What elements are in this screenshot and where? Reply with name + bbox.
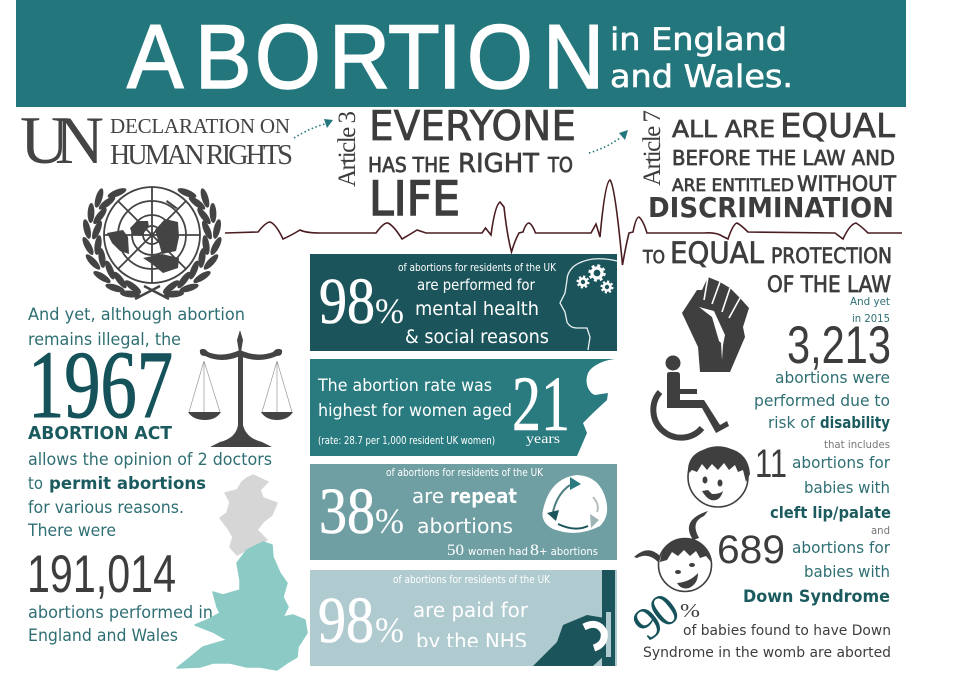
panel: repeat abortions: women had xyxy=(468,545,528,558)
continents xyxy=(107,200,179,273)
heartbeat line xyxy=(225,180,902,265)
article 7 text: WITHOUT xyxy=(797,172,896,196)
stat: 38%: 38 xyxy=(319,475,375,548)
panel: left column text: There were xyxy=(27,521,116,541)
subtitle: in England xyxy=(610,22,787,58)
panel: right column stats: of babies found to have Down xyxy=(683,623,891,639)
panel: left column text: abortions performed in xyxy=(28,603,213,623)
panel: paid by the NHS xyxy=(310,570,617,666)
panel: right column stats: abortions were xyxy=(775,368,890,387)
panel: repeat abortions: 50 xyxy=(447,542,464,559)
stat: 90%: 90 xyxy=(623,583,689,650)
header banner xyxy=(16,0,906,108)
article 7 text: BEFORE THE LAW AND xyxy=(672,146,895,170)
icon: girl face xyxy=(634,511,712,592)
laurel xyxy=(80,186,143,298)
panel: left column text: remains illegal, the xyxy=(28,330,181,350)
panel: mental health: are performed for xyxy=(417,276,536,294)
panel: right column stats: babies with xyxy=(804,478,890,497)
panel: left column text: to xyxy=(28,474,43,494)
article 7 text: OF THE LAW xyxy=(767,273,891,298)
stat: 98%: 98 xyxy=(319,265,375,338)
panel: mental health: mental health xyxy=(415,298,539,320)
panel: mental health: of abortions for residents of the UK xyxy=(398,261,557,274)
panel: left column text: 191,014 xyxy=(27,545,176,604)
article 3 text: EVERYONE xyxy=(369,102,576,150)
stat: 21 years: 21 xyxy=(512,360,570,447)
article 7 text xyxy=(639,106,896,298)
panel: age 21: highest for women aged xyxy=(318,401,512,421)
panel: repeat abortions: 8 xyxy=(530,542,539,559)
icon: head with gears xyxy=(560,259,617,350)
globe xyxy=(104,187,200,283)
title: ABORTION xyxy=(127,5,604,108)
panel: right column stats: disability xyxy=(820,413,890,432)
icon: cycle of arrows xyxy=(542,475,607,533)
panel: left column text: for various reasons. xyxy=(28,498,184,518)
article 3 text: Article 3 xyxy=(334,111,361,187)
panel: right column stats: that includes xyxy=(824,438,890,451)
icon: map of Scotland xyxy=(220,475,277,555)
panel: left column text: ABORTION ACT xyxy=(28,423,173,444)
heading: UN declaration on human rights: DECLARATION ON xyxy=(110,114,290,138)
panel: left column text: And yet, although abortion xyxy=(28,305,245,325)
article 7 text: DISCRIMINATION xyxy=(648,191,894,224)
arrow: to article 3 xyxy=(294,119,333,138)
panel: right column stats: performed due to xyxy=(754,391,890,410)
panel: right column stats: 3,213 xyxy=(787,316,891,375)
article 3 text: RIGHT xyxy=(458,149,539,179)
panel: left column text xyxy=(27,305,272,646)
panel: left column text: permit abortions xyxy=(49,474,206,494)
icon: raised fist xyxy=(682,277,749,372)
panel: age 21 xyxy=(310,359,615,456)
panel: right column stats: babies with xyxy=(804,562,890,581)
panel: right column stats: abortions for xyxy=(792,453,890,472)
icon: map of England and Wales xyxy=(177,542,307,670)
panel: right column stats xyxy=(623,295,891,661)
panel: paid by the NHS: by the NHS xyxy=(416,629,527,653)
panel: left column text: 1967 xyxy=(28,331,173,438)
arrow: to article 7 xyxy=(589,130,628,153)
panel: right column stats: abortions for xyxy=(792,538,890,557)
panel: repeat abortions: + abortions xyxy=(539,545,598,558)
icon: scales of justice xyxy=(188,330,293,447)
article 7 text: ALL ARE xyxy=(672,117,775,143)
stat: 98%: % xyxy=(375,291,404,331)
heading: UN declaration on human rights: HUMAN RIGHTS xyxy=(110,140,293,171)
panel: right column stats: cleft lip/palate xyxy=(770,503,891,522)
panel: right column stats: Down Syndrome xyxy=(743,587,890,607)
article 3 text: LIFE xyxy=(369,172,460,227)
article 7 text: EQUAL xyxy=(670,236,764,270)
subtitle: and Wales. xyxy=(610,59,793,95)
panel: repeat abortions: of abortions for residents of the UK xyxy=(386,466,544,479)
stat: 98%: 98 xyxy=(318,584,374,657)
panel: repeat abortions xyxy=(310,464,617,560)
panel: paid by the NHS: of abortions for residents of the UK xyxy=(393,573,551,586)
icon: boy face xyxy=(688,447,750,507)
panel: paid by the NHS: are paid for xyxy=(413,598,529,622)
panel: left column text: England and Wales xyxy=(28,626,178,646)
panel: right column stats: and xyxy=(871,524,890,537)
article 7 text: EQUAL xyxy=(780,106,896,145)
panel: repeat abortions: abortions xyxy=(417,514,513,538)
stat: 38%: % xyxy=(375,501,404,541)
panel: age 21: (rate: 28.7 per 1,000 resident UK women) xyxy=(318,434,495,447)
article 7 text: TO xyxy=(642,247,665,268)
panel: left column text: allows the opinion of 2 doctors xyxy=(28,450,272,470)
panel: right column stats: 689 xyxy=(717,528,785,572)
article 7 text: ARE ENTITLED xyxy=(672,176,794,196)
panel: mental health xyxy=(310,254,617,351)
icon: UN emblem xyxy=(80,186,224,299)
panel: right column stats: risk of xyxy=(768,413,815,432)
article 3 text xyxy=(334,102,576,227)
article 3 text: HAS THE xyxy=(368,153,450,177)
article 7 text: PROTECTION xyxy=(771,244,892,268)
stat: 98%: % xyxy=(375,610,404,650)
article 3 text: TO xyxy=(547,153,573,177)
article 7 text: Article 7 xyxy=(639,110,666,186)
panel: right column stats: in 2015 xyxy=(852,312,890,325)
panel: repeat abortions: repeat xyxy=(450,484,517,508)
stat: 21 years: years xyxy=(526,432,560,447)
heading: UN declaration on human rights xyxy=(20,102,293,178)
panel: mental health: & social reasons xyxy=(405,326,549,348)
panel: right column stats: Syndrome in the womb are aborted xyxy=(643,645,891,661)
panel: right column stats: And yet xyxy=(850,295,891,308)
stat: 90%: % xyxy=(680,600,700,622)
icon: wheelchair user xyxy=(653,356,729,438)
heading: UN declaration on human rights: UN xyxy=(20,102,104,178)
panel: right column stats: 11 xyxy=(755,442,787,486)
icon: hand xyxy=(533,570,615,666)
panel: repeat abortions: are xyxy=(412,484,444,508)
panel: age 21: The abortion rate was xyxy=(317,376,492,396)
subtitle xyxy=(610,22,793,95)
